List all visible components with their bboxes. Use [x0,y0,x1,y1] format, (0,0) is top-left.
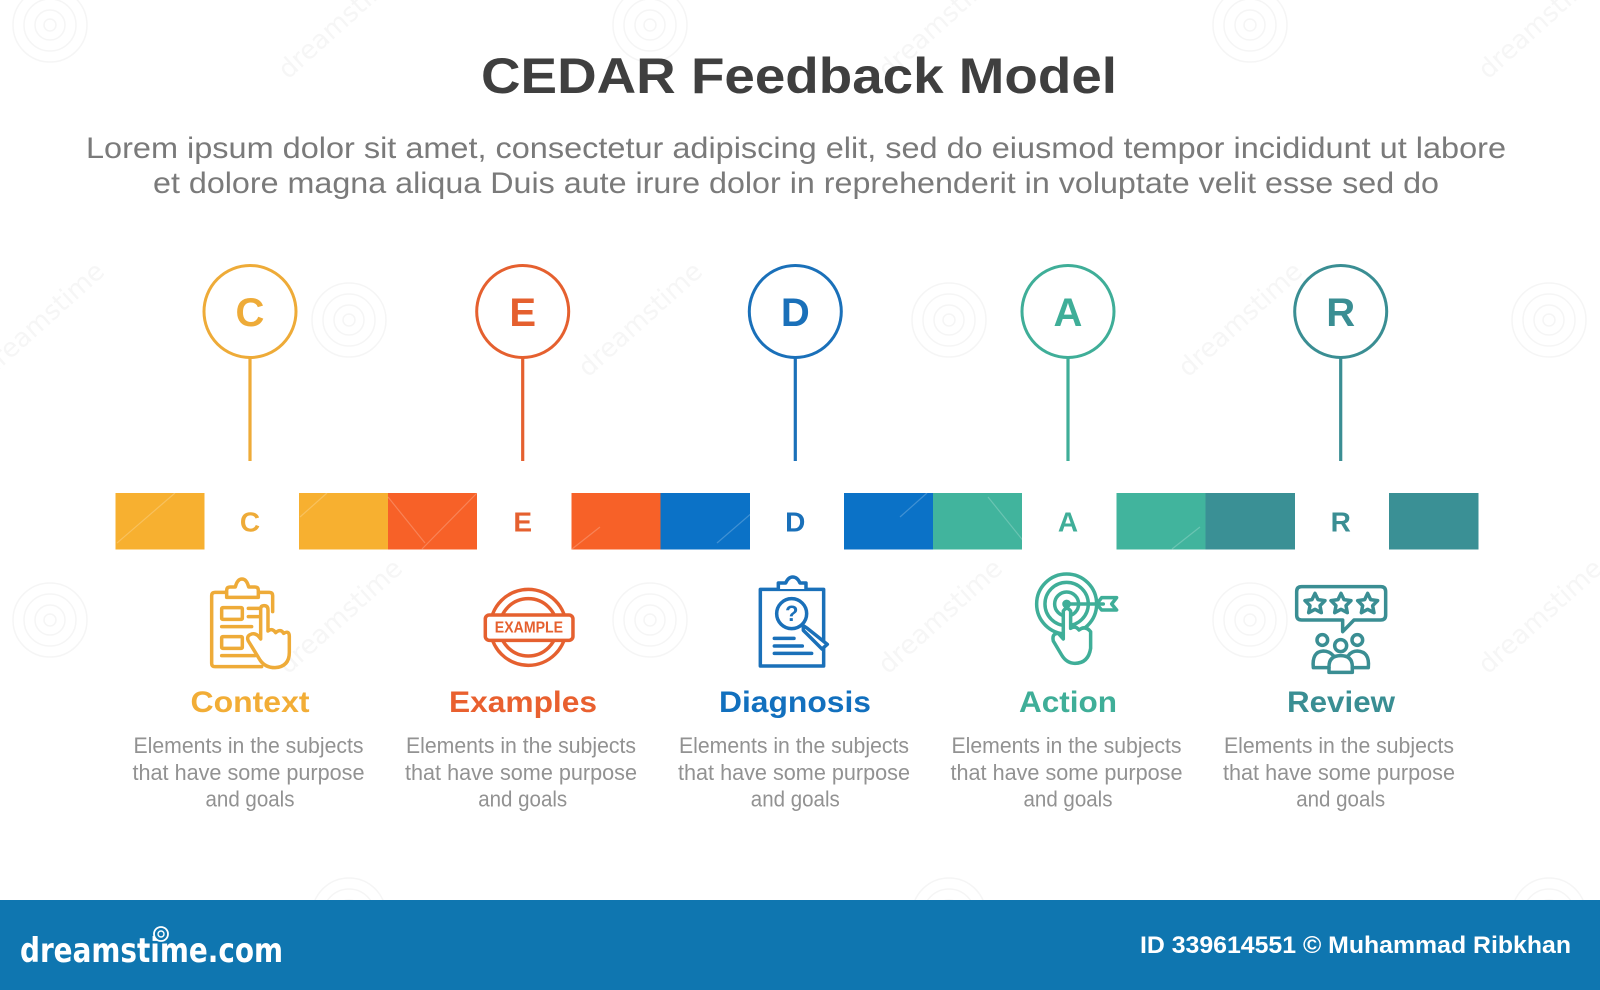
icon: clipboard with magnifier [760,577,827,666]
icon: target with hand [1037,574,1117,663]
description: Diagnosis [678,733,910,812]
footer bar [0,900,1600,990]
pin: C: C [236,291,264,335]
column: diagnosis [678,577,910,812]
icon: clipboard with pointing hand [212,579,289,668]
heading: Examples: Examples [449,686,597,719]
timeline bar: R [1331,506,1351,538]
description: Diagnosis: Elements in the subjects [679,733,909,758]
description: Examples: Elements in the subjects [406,733,636,758]
description: Context: Elements in the subjects [134,733,364,758]
description: Action: and goals [1024,786,1112,812]
description: Context [132,733,364,812]
heading: Action: Action [1019,686,1117,719]
heading: Review: Review [1287,686,1396,719]
heading: Diagnosis: Diagnosis [719,686,871,719]
footer logo: dreamstime.com [20,931,283,971]
icon: rating bubble with people [1297,587,1386,672]
subtitle: et dolore magna aliqua Duis aute irure dolor in reprehenderit in voluptate velit esse sed do [153,167,1439,200]
title: CEDAR Feedback Model [481,48,1117,104]
description: Examples [405,733,637,812]
icon: example stamp [485,589,573,665]
description: Review: and goals [1296,786,1385,812]
description: Examples: and goals [478,786,567,812]
subtitle [86,132,1506,200]
heading: Context: Context [190,686,310,719]
pin: D: D [781,291,810,335]
description: Action: that have some purpose [950,760,1182,785]
description: Action [950,733,1182,812]
column: review [1223,587,1455,812]
description: Review [1223,733,1455,812]
description: Review: that have some purpose [1223,760,1455,785]
description: Action: Elements in the subjects [952,733,1182,758]
description: Context: and goals [206,786,294,812]
pin: A [1022,266,1114,461]
timeline bar: C [240,506,260,538]
description: Diagnosis: that have some purpose [678,760,910,785]
pin: A: A [1054,291,1082,335]
pin: D [749,266,841,461]
column: context [132,579,364,812]
pin: E: E [509,291,536,335]
timeline bar [116,493,1600,550]
pin: R [1295,266,1387,461]
timeline bar: D [785,506,805,538]
column: examples [405,589,637,812]
footer credit: ID 339614551 © Muhammad Ribkhan [1140,932,1571,959]
icon: clipboard with magnifier: ? [785,601,798,626]
pin: C [204,266,296,461]
icon: example stamp: EXAMPLE [495,620,563,637]
description: Review: Elements in the subjects [1224,733,1454,758]
description: Context: that have some purpose [132,760,364,785]
subtitle: Lorem ipsum dolor sit amet, consectetur adipiscing elit, sed do eiusmod tempor incididunt ut labore [86,132,1506,165]
timeline bar: E [513,506,532,538]
column: action [950,574,1182,812]
description: Diagnosis: and goals [751,786,840,812]
description: Examples: that have some purpose [405,760,637,785]
pin: R: R [1326,291,1355,335]
timeline bar: A [1058,506,1078,538]
pin: E [477,266,569,461]
